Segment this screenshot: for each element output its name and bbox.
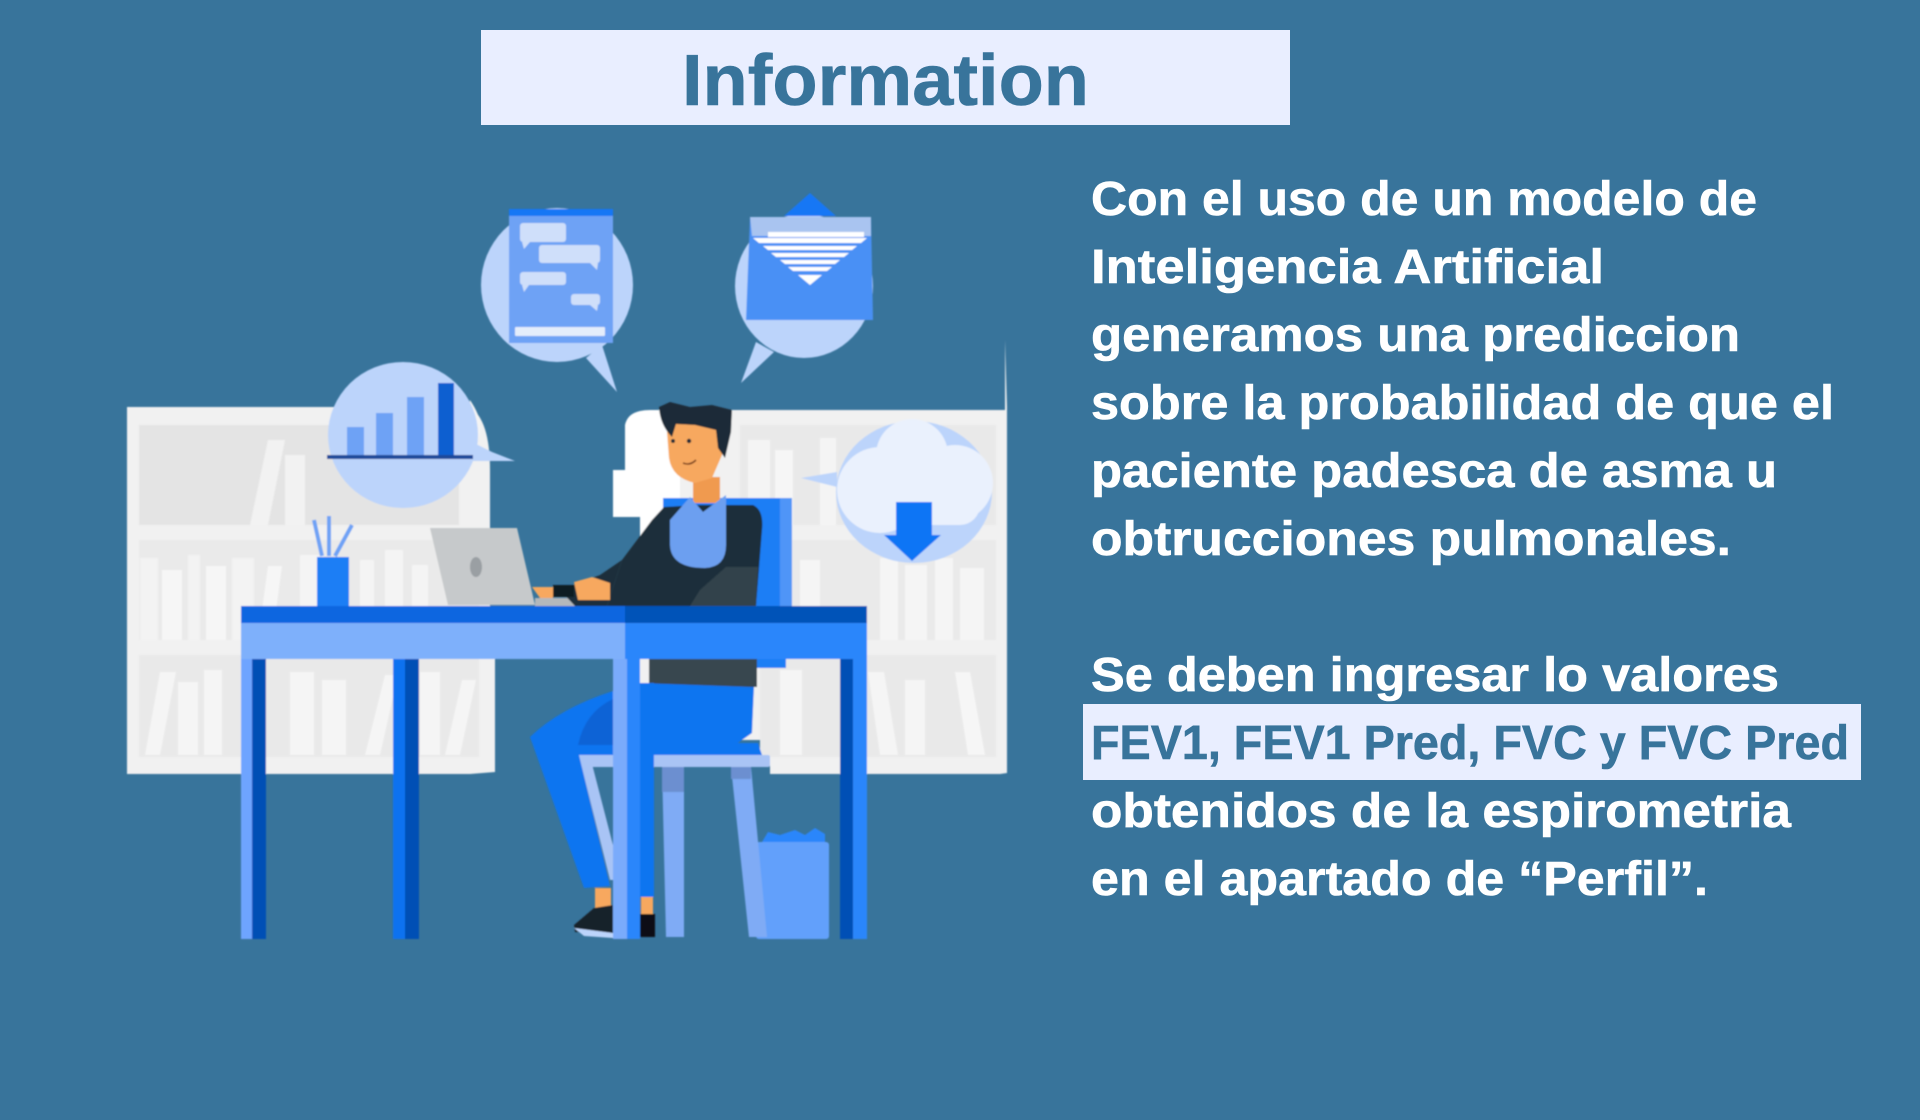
person lower body [530,655,786,938]
chart bubble [327,362,515,508]
text block: model description [1091,173,1834,566]
text block: input instructions: en el apartado de “Perfil”. [1091,853,1708,906]
desk top surface [241,606,867,623]
chair seat and legs [577,743,770,937]
person upper body [532,477,762,606]
chat bubble [481,208,633,392]
bookshelf left [127,407,495,774]
text block: model description: obtrucciones pulmonales. [1091,513,1731,566]
text block: model description: paciente padesca de asma u [1091,445,1777,498]
cloud download bubble [801,419,993,563]
text block: input instructions [1083,649,1861,906]
text block: model description: sobre la probabilidad de que el [1091,377,1834,430]
text block: model description: Inteligencia Artificial [1091,241,1604,294]
office chair back [663,498,792,606]
desk [241,606,867,939]
text block: input instructions: Se deben ingresar lo valores [1091,649,1779,702]
text block: model description: Con el uso de un modelo de [1091,173,1757,226]
illustration: person working at desk [127,193,1007,939]
text block: model description: generamos una prediccion [1091,309,1740,362]
highlighted values [1083,704,1861,780]
desk legs [241,659,867,939]
pencil cup [314,516,352,606]
laptop [430,528,585,606]
bookshelf right [613,340,1007,774]
mail bubble [735,193,873,383]
desk front panel [241,623,867,659]
title banner [481,30,1290,125]
highlighted values: FEV1, FEV1 Pred, FVC y FVC Pred [1091,717,1849,770]
trash bin [756,828,829,939]
person head [659,402,732,483]
title banner: Information [682,41,1089,121]
text block: input instructions: obtenidos de la espirometria [1091,785,1791,838]
